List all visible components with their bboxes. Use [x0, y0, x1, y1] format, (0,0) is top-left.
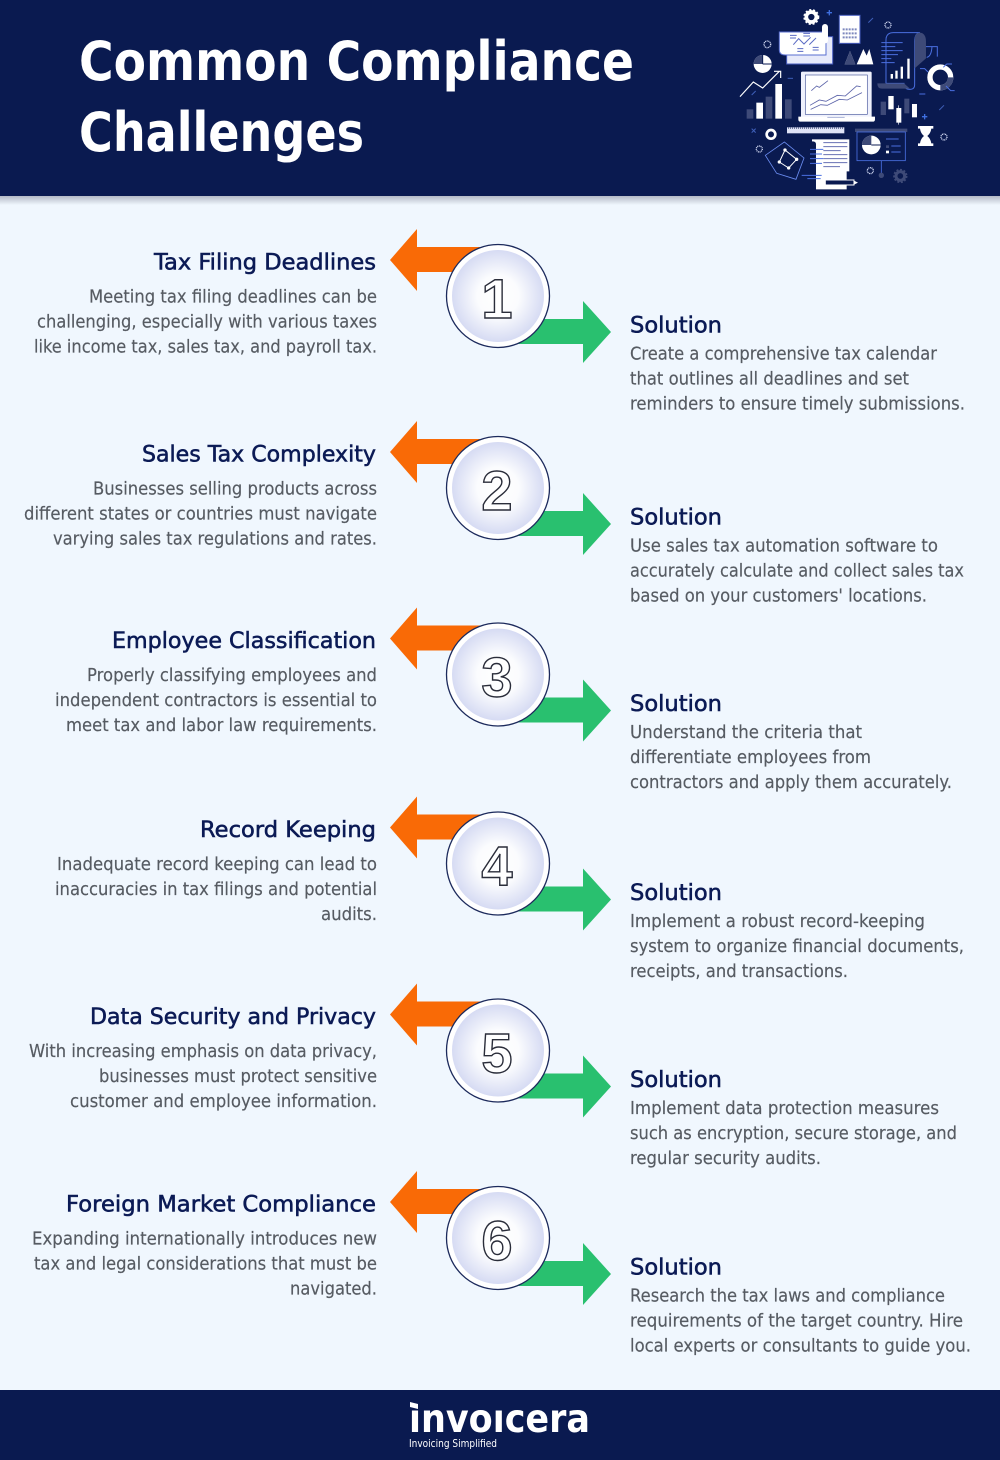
text block: solution 5: Implement data protection measures: [630, 1099, 939, 1119]
logo: invoicera: Invoicing Simplified: [409, 1437, 497, 1450]
text block: challenge 6: Expanding internationally introduces new: [32, 1230, 377, 1250]
text block: challenge 1: Meeting tax filing deadlines can be: [89, 288, 377, 308]
arrow: solution right: [510, 868, 611, 930]
text block: challenge 2: [24, 480, 377, 550]
text block: solution 4: receipts, and transactions.: [630, 962, 848, 982]
text block: solution 2: Use sales tax automation software to: [630, 536, 938, 556]
number badge 6: [446, 1186, 550, 1290]
donut: [930, 67, 951, 88]
text block: challenge 3: meet tax and labor law requirements.: [66, 716, 377, 736]
hourglass: [918, 126, 933, 146]
arrow: solution right: [510, 680, 611, 742]
receipt scroll: [886, 33, 920, 89]
text block: challenge 5: With increasing emphasis on data privacy,: [29, 1042, 377, 1062]
text block: challenge 1: [34, 288, 377, 358]
heading: solution 6: Solution: [630, 1256, 722, 1280]
number badge 4: [446, 812, 550, 915]
panel: challenge 2: [24, 421, 964, 606]
footer banner: [0, 1390, 1000, 1460]
heading: solution 4: Solution: [630, 881, 722, 906]
arrow: challenge left: [390, 421, 490, 483]
heading: challenge 2: Sales Tax Complexity: [142, 442, 376, 468]
text block: challenge 6: navigated.: [290, 1280, 377, 1300]
text block: challenge 1: like income tax, sales tax, and payroll tax.: [34, 338, 377, 358]
text block: solution 1: that outlines all deadlines and set: [630, 370, 909, 390]
logo: invoicera: invoicera: [409, 1397, 590, 1442]
text block: solution 3: differentiate employees from: [630, 748, 871, 768]
number badge 5: 5: [481, 1022, 513, 1084]
text block: challenge 4: [55, 855, 377, 925]
title: Common Compliance: [79, 30, 634, 93]
text block: challenge 1: challenging, especially with various taxes: [37, 312, 377, 332]
text block: solution 3: contractors and apply them accurately.: [630, 773, 952, 793]
number badge 5: [446, 999, 550, 1102]
number badge 3: 3: [481, 646, 513, 708]
text block: challenge 3: [55, 666, 377, 736]
text block: solution 1: Create a comprehensive tax calendar: [630, 344, 938, 364]
text block: challenge 6: [32, 1230, 377, 1300]
arrow: solution right: [510, 493, 611, 555]
arrow: challenge left: [390, 796, 490, 858]
heading: challenge 4: Record Keeping: [200, 818, 376, 843]
heading: solution 1: Solution: [630, 314, 722, 338]
heading: challenge 3: Employee Classification: [112, 629, 376, 654]
number badge 4: 4: [481, 834, 513, 898]
trend arrow and bars: [740, 71, 779, 97]
arrow: challenge left: [390, 1171, 490, 1233]
text block: solution 3: Understand the criteria that: [630, 723, 862, 743]
text block: solution 1: reminders to ensure timely submissions.: [630, 394, 965, 414]
candles: [881, 102, 886, 115]
arrow: solution right: [510, 301, 611, 363]
number badge 1: [446, 244, 550, 348]
text block: solution 6: Research the tax laws and compliance: [630, 1286, 945, 1306]
number badge 1: 1: [481, 267, 513, 330]
heading: challenge 5: Data Security and Privacy: [90, 1005, 376, 1030]
title: [79, 30, 634, 164]
document with pen: [812, 139, 849, 189]
presentation board: [855, 129, 907, 132]
gear top: [806, 12, 816, 22]
arrow: challenge left: [390, 608, 490, 670]
text block: solution 6: local experts or consultants to guide you.: [630, 1336, 971, 1356]
text block: challenge 5: customer and employee information.: [70, 1092, 377, 1112]
number badge 6: 6: [481, 1209, 513, 1272]
calculator: [839, 15, 860, 43]
text block: solution 2: based on your customers' locations.: [630, 586, 927, 606]
text block: challenge 4: audits.: [321, 905, 377, 925]
text block: solution 5: such as encryption, secure storage, and: [630, 1124, 957, 1144]
text block: challenge 6: tax and legal considerations that must be: [34, 1254, 377, 1274]
text block: solution 1: [630, 344, 965, 414]
polygon diagram: [765, 142, 804, 179]
panel: challenge 1: [34, 229, 965, 414]
panel: challenge 6: [32, 1171, 971, 1356]
heading: solution 5: Solution: [630, 1068, 722, 1093]
text block: challenge 3: Properly classifying employees and: [87, 666, 377, 686]
number badge 3: [446, 623, 550, 726]
ruler: [787, 127, 844, 133]
header banner: [0, 0, 1000, 196]
text block: solution 5: [630, 1099, 957, 1169]
text block: solution 5: regular security audits.: [630, 1149, 821, 1169]
text block: solution 4: Implement a robust record-keeping: [630, 912, 925, 932]
panel: challenge 5: [29, 984, 957, 1169]
laptop: [801, 72, 872, 118]
text block: solution 2: [630, 536, 964, 606]
heading: challenge 1: Tax Filing Deadlines: [153, 250, 376, 276]
heading: solution 3: Solution: [630, 692, 722, 717]
icon: finance and data illustration: [740, 10, 955, 189]
text block: challenge 3: independent contractors is essential to: [55, 691, 377, 711]
mountains: [845, 49, 873, 64]
arrow: challenge left: [390, 984, 490, 1046]
heading: solution 2: Solution: [630, 506, 722, 530]
text block: challenge 4: inaccuracies in tax filings and potential: [55, 880, 377, 900]
text block: challenge 2: different states or countries must navigate: [24, 504, 377, 524]
text block: challenge 2: Businesses selling products across: [93, 480, 377, 500]
text block: solution 4: system to organize financial documents,: [630, 937, 964, 957]
arrow: solution right: [510, 1243, 611, 1305]
text block: solution 6: [630, 1286, 971, 1356]
text block: solution 2: accurately calculate and collect sales tax: [630, 562, 964, 582]
number badge 2: 2: [481, 459, 513, 522]
arrow: challenge left: [390, 229, 490, 291]
arrow: solution right: [510, 1056, 611, 1118]
text block: solution 6: requirements of the target country. Hire: [630, 1312, 963, 1332]
text block: solution 4: [630, 912, 964, 982]
panel: challenge 4: [55, 796, 964, 982]
text block: challenge 5: businesses must protect sensitive: [99, 1067, 377, 1087]
heading: challenge 6: Foreign Market Compliance: [66, 1192, 376, 1218]
number badge 2: [446, 436, 550, 540]
text block: solution 3: [630, 723, 952, 793]
pie: [754, 55, 772, 73]
text block: challenge 4: Inadequate record keeping can lead to: [57, 855, 377, 875]
title: Challenges: [79, 101, 364, 164]
small ring: [767, 130, 775, 139]
text block: challenge 5: [29, 1042, 377, 1112]
scroll chart sheets: [787, 37, 833, 64]
text block: challenge 2: varying sales tax regulations and rates.: [53, 530, 377, 550]
panel: challenge 3: [55, 608, 952, 793]
